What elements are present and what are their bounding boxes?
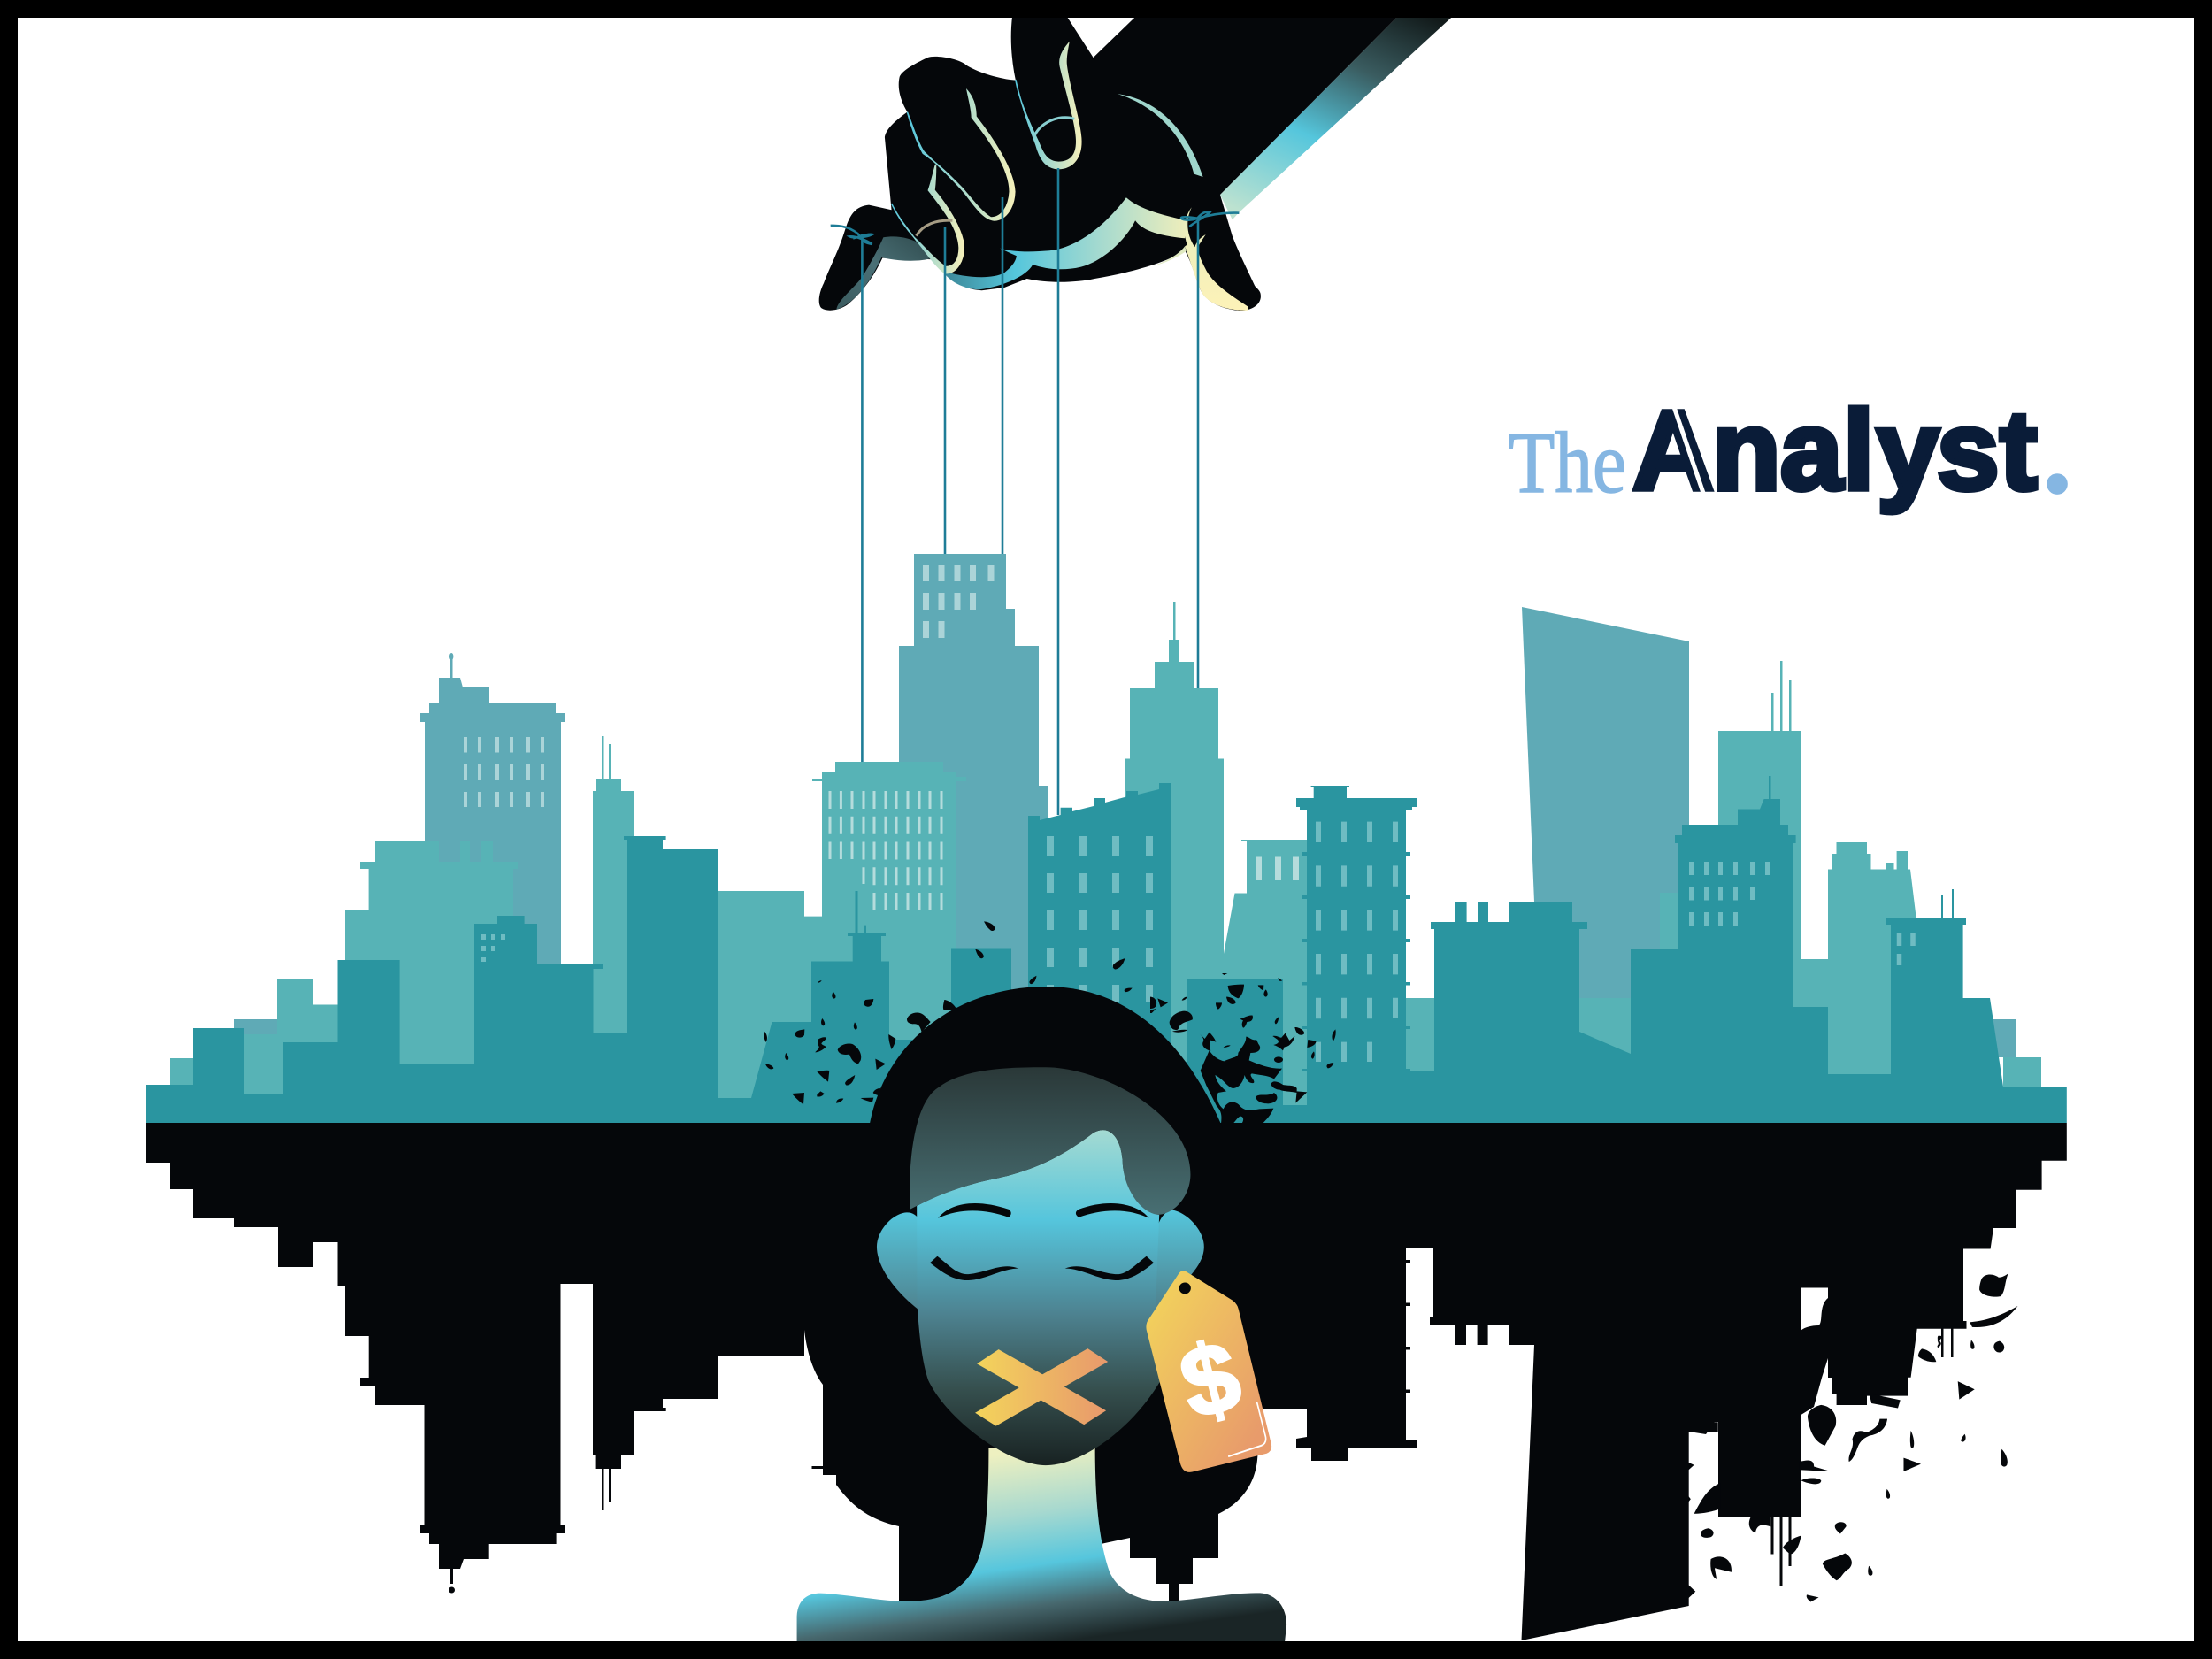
white notch in reflected tower	[1801, 1288, 1828, 1331]
logo word: The: The	[1509, 415, 1626, 511]
puppet strings	[862, 168, 1198, 815]
closed eyes	[930, 1256, 1154, 1280]
fingernail arc	[1034, 118, 1074, 137]
front buildings: dark teal	[146, 776, 2067, 1123]
eyebrows	[938, 1203, 1149, 1218]
logo word: Analyst: Analyst	[1632, 388, 2037, 513]
neck and shoulders	[797, 1448, 1286, 1642]
crumbling debris right of hair	[1150, 973, 1336, 1124]
debris falling on lower right	[1686, 1273, 2017, 1601]
logo full stop: .	[2035, 335, 2079, 531]
window lights on middle buildings	[830, 791, 1295, 910]
thumb highlight	[1185, 207, 1248, 311]
puppeteer hand	[819, 15, 1455, 311]
arm highlight gradient	[1220, 15, 1455, 219]
city skyline: upper teal buildings	[146, 554, 2067, 1123]
hair crown	[869, 987, 1223, 1128]
logo stripe through the A	[1674, 407, 1704, 495]
ears	[877, 1210, 1204, 1315]
palm crease	[1118, 94, 1203, 177]
woman silenced with tape and price tag	[797, 1067, 1286, 1642]
lower palm sliver	[1153, 246, 1187, 266]
face	[917, 1130, 1163, 1465]
underside band of palm	[943, 197, 1187, 289]
middle buildings: mid teal	[170, 602, 2041, 1115]
fingers contour lines	[892, 43, 1081, 273]
reflected antennas	[450, 1328, 1954, 1586]
hand silhouette	[819, 15, 1400, 311]
dollar sign on price tag: $	[1170, 1319, 1251, 1440]
back buildings: slate teal	[234, 554, 2016, 1062]
price tag	[1146, 1271, 1271, 1472]
crossed tape over mouth	[975, 1348, 1108, 1426]
window lights on front buildings	[483, 822, 1913, 1062]
string knots	[831, 212, 1239, 244]
window lights on back buildings	[465, 565, 991, 807]
shadow beside little finger	[836, 236, 932, 310]
window ledges on dark tower	[1302, 852, 1307, 1071]
fringe of hair	[910, 1067, 1190, 1215]
logo: The Analyst.	[1509, 335, 2079, 531]
knuckle arc	[917, 220, 952, 236]
black inverted skyline reflection and hair	[146, 987, 2067, 1640]
small debris flecks above hair	[974, 918, 1133, 993]
crumbling debris left of hair	[764, 980, 957, 1104]
